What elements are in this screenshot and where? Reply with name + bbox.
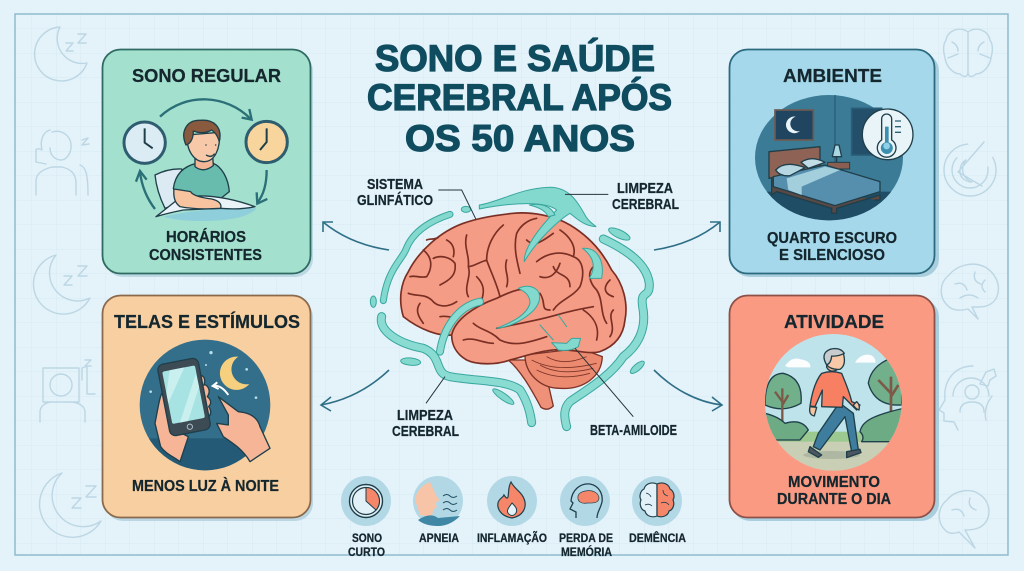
glymphatic streams <box>370 187 646 407</box>
caption: horários consistentes <box>149 227 262 264</box>
illustration: dark bedroom with thermometer <box>753 95 913 222</box>
illustration: person in bed with clocks <box>124 99 287 221</box>
caption: movimento durante o dia <box>777 474 891 508</box>
caption: quarto escuro e silencioso <box>767 230 897 264</box>
label: limpeza cerebral top: LIMPEZA <box>617 180 673 197</box>
label: beta-amiloide: BETA-AMILOIDE <box>590 422 677 439</box>
right decorative icons <box>939 29 998 548</box>
icon: sono curto: CURTO <box>348 547 385 559</box>
panel: atividade <box>730 296 939 521</box>
caption: quarto escuro e silencioso: E SILENCIOSO <box>779 247 885 264</box>
arrow: brain to sono regular <box>323 222 389 250</box>
arrow: brain to ambiente <box>654 222 720 250</box>
icon: demência <box>629 476 686 545</box>
arrow: brain to telas <box>321 370 389 411</box>
heading: sono regular: SONO REGULAR <box>132 65 281 86</box>
label: sistema glinfático: SISTEMA <box>367 176 423 193</box>
arrow: brain to atividade <box>654 370 722 411</box>
label: sistema glinfático: GLINFÁTICO <box>357 192 433 209</box>
title: SONO E SAÚDE <box>375 37 655 79</box>
title <box>367 37 672 159</box>
icon: perda de memória: PERDA DE <box>559 533 613 545</box>
label: sistema glinfático <box>357 176 433 209</box>
caption: horários consistentes: CONSISTENTES <box>149 247 262 264</box>
caption: movimento durante o dia: MOVIMENTO <box>788 474 880 491</box>
title: CEREBRAL APÓS <box>367 76 672 118</box>
brain with glymphatic flows <box>370 187 649 427</box>
label: limpeza cerebral top <box>612 180 679 213</box>
panel: telas e estímulos <box>102 296 313 521</box>
icon: sono curto <box>341 476 391 559</box>
illustration: older man walking in park <box>765 334 902 471</box>
panel: sono regular <box>102 50 313 277</box>
cerebellum and stem <box>508 348 602 409</box>
icon: inflamação: INFLAMAÇÃO <box>477 532 547 545</box>
caption: movimento durante o dia: DURANTE O DIA <box>777 491 891 508</box>
icon: perda de memória: MEMÓRIA <box>561 546 612 559</box>
heading: ambiente: AMBIENTE <box>783 65 882 86</box>
label: limpeza cerebral bottom: LIMPEZA <box>397 407 453 424</box>
illustration: phone at night <box>133 340 273 475</box>
caption: horários consistentes: HORÁRIOS <box>166 227 246 246</box>
left decorative icons <box>33 27 101 537</box>
title: OS 50 ANOS <box>405 117 635 159</box>
caption: quarto escuro e silencioso: QUARTO ESCURO <box>767 230 897 247</box>
heading: atividade: ATIVIDADE <box>784 311 884 332</box>
icon: sono curto: SONO <box>352 533 382 545</box>
caption: menos luz à noite: MENOS LUZ À NOITE <box>132 476 279 495</box>
cerebrum <box>401 213 626 364</box>
icon: apneia: APNEIA <box>419 533 459 545</box>
panel: ambiente <box>730 50 939 277</box>
label: limpeza cerebral bottom <box>392 407 459 440</box>
label: limpeza cerebral top: CEREBRAL <box>612 196 679 213</box>
risk icons row <box>341 476 686 559</box>
icon: perda de memória <box>559 476 613 559</box>
icon: inflamação <box>477 476 547 545</box>
icon: apneia <box>413 476 463 545</box>
icon: demência: DEMÊNCIA <box>629 532 686 545</box>
heading: telas e estímulos: TELAS E ESTÍMULOS <box>114 311 300 332</box>
leader lines <box>426 190 633 417</box>
label: limpeza cerebral bottom: CEREBRAL <box>392 423 459 440</box>
